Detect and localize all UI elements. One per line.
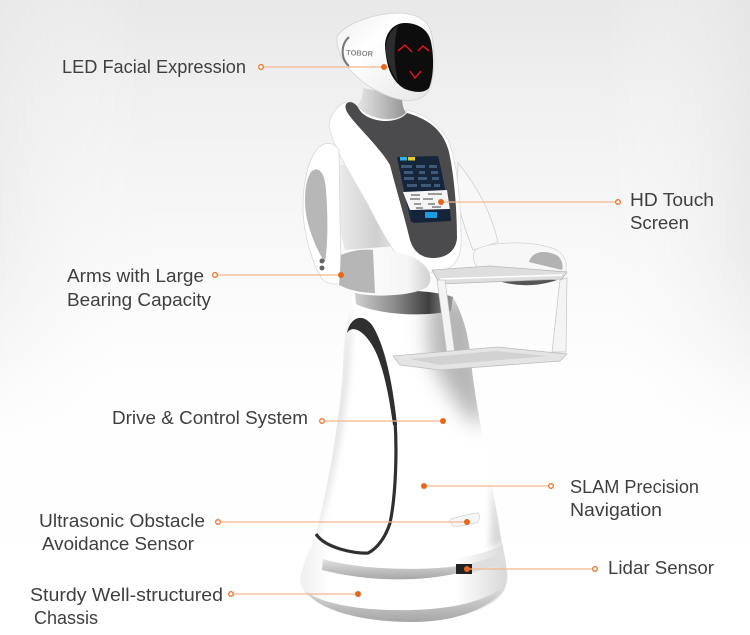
callout: LED Facial Expression [62,57,387,77]
robot torso [329,102,461,272]
robot left upper arm [303,143,341,284]
callout: Lidar Sensor: Lidar Sensor [608,558,714,578]
tray supports [437,278,567,362]
curved logo arc [343,37,349,66]
callout: Arms with Large Bearing Capacity: Arms with Large [67,266,204,286]
callout: Arms with Large Bearing Capacity [67,266,344,310]
callout: SLAM Precision Navigation [421,477,699,520]
callout: Drive & Control System [112,408,446,428]
callout: HD Touch Screen: HD Touch [630,190,714,210]
sensor pill [450,513,479,526]
callout: SLAM Precision Navigation: SLAM Precision [570,477,699,497]
callout: Sturdy Well-structured Chassis [30,585,361,628]
robot head [337,13,434,101]
face display [385,23,433,92]
LED eyes and mouth [398,45,429,78]
callout: HD Touch Screen: Screen [630,213,689,233]
robot illustration [300,13,567,622]
robot right forearm [473,243,566,285]
robot waist [355,290,453,314]
top tray [432,266,567,284]
robot left forearm [338,250,430,296]
callout: Ultrasonic Obstacle Avoidance Sensor: Avoidance Sensor [42,534,194,554]
callout: Ultrasonic Obstacle Avoidance Sensor [39,511,470,554]
lower tray [393,347,567,370]
callout: Sturdy Well-structured Chassis: Sturdy Well-structured [30,585,223,605]
logo text: TOBOR [346,48,374,58]
robot shoulders and upper arms behind torso [338,163,498,250]
callout: LED Facial Expression: LED Facial Expression [62,57,246,77]
robot base chassis [300,540,507,622]
robot skirt body [312,297,506,574]
callout: SLAM Precision Navigation: Navigation [570,500,662,520]
side black trim [347,318,397,425]
touch screen [397,156,451,223]
robot neck [358,88,408,125]
background: soft studio wall [0,0,750,376]
callout: Drive & Control System: Drive & Control System [112,408,308,428]
callout: Ultrasonic Obstacle Avoidance Sensor: Ultrasonic Obstacle [39,511,205,531]
callout: HD Touch Screen [438,190,714,233]
chest dark panel [346,102,457,258]
callout: Lidar Sensor [464,558,714,578]
callout: Sturdy Well-structured Chassis: Chassis [34,608,98,628]
lidar window [456,564,472,574]
callout: Arms with Large Bearing Capacity: Bearing Capacity [67,290,211,310]
